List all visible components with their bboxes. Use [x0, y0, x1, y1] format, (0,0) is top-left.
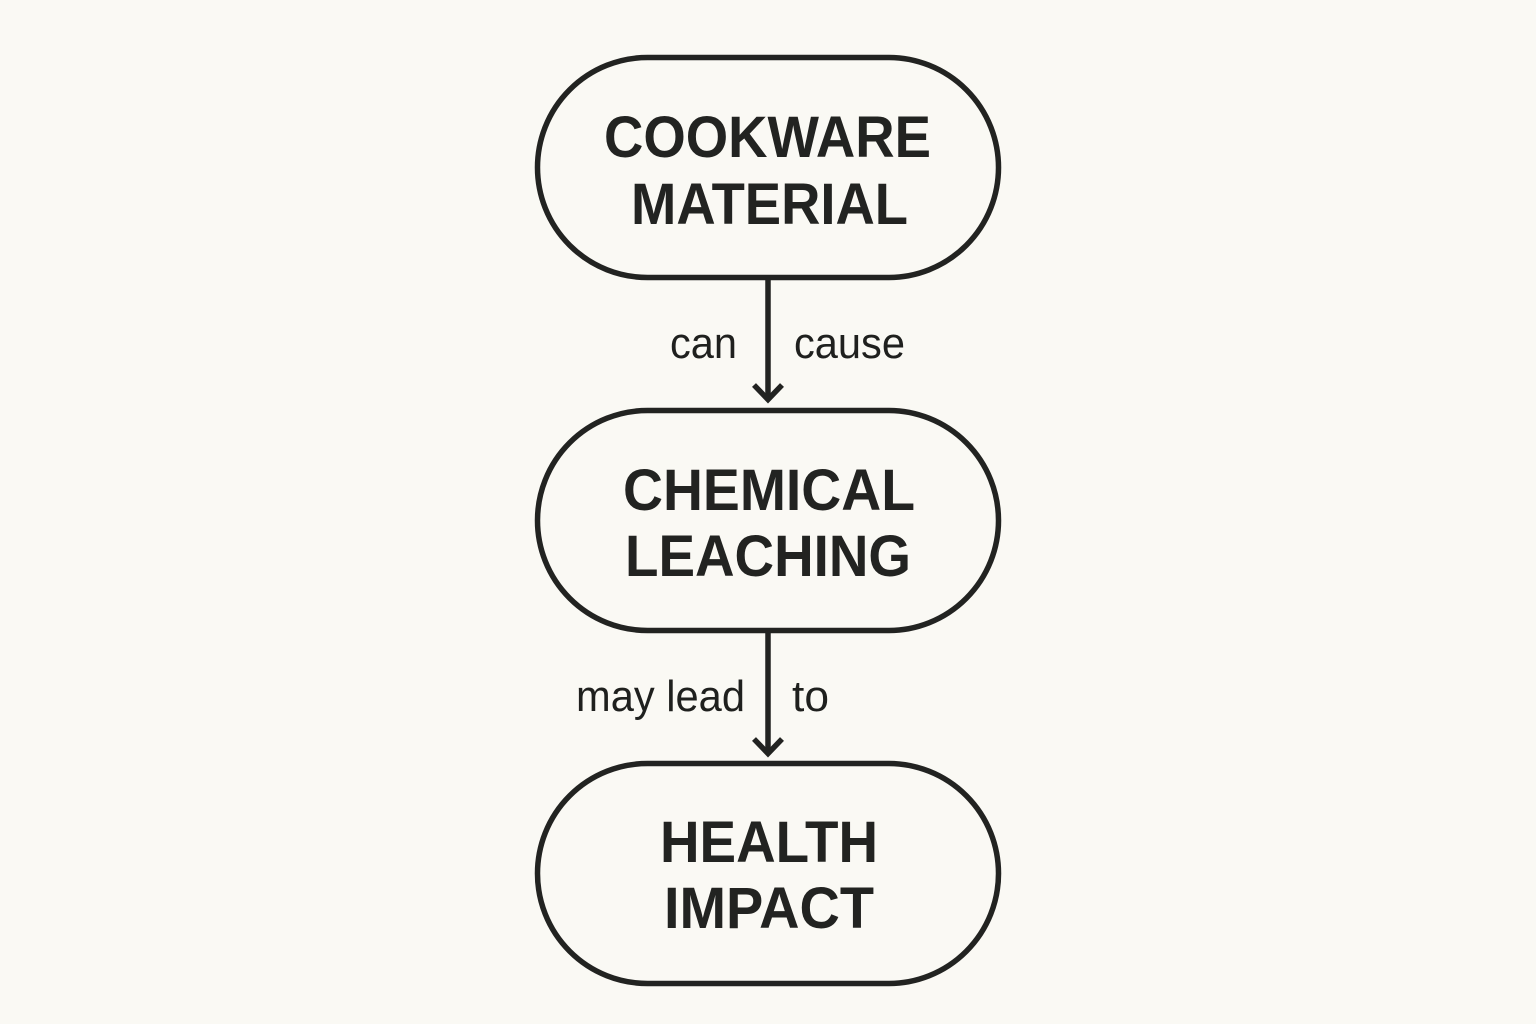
node: health impact: IMPACT [664, 876, 874, 941]
node: health impact [538, 764, 998, 984]
label: can: can [670, 319, 737, 368]
label: cause: cause [794, 319, 905, 368]
node: health impact: HEALTH [660, 810, 878, 875]
label: to: to [792, 672, 829, 721]
node: chemical leaching [538, 410, 998, 630]
node: cookware material [538, 58, 998, 278]
node: cookware material: MATERIAL [631, 172, 908, 237]
label: may lead: may lead [576, 672, 745, 721]
node: cookware material: COOKWARE [604, 105, 931, 170]
arrow: chemical leaching to health impact [754, 632, 782, 754]
node: chemical leaching: CHEMICAL [623, 458, 915, 523]
node: chemical leaching: LEACHING [625, 524, 911, 589]
arrow: cookware material to chemical leaching [754, 279, 782, 400]
